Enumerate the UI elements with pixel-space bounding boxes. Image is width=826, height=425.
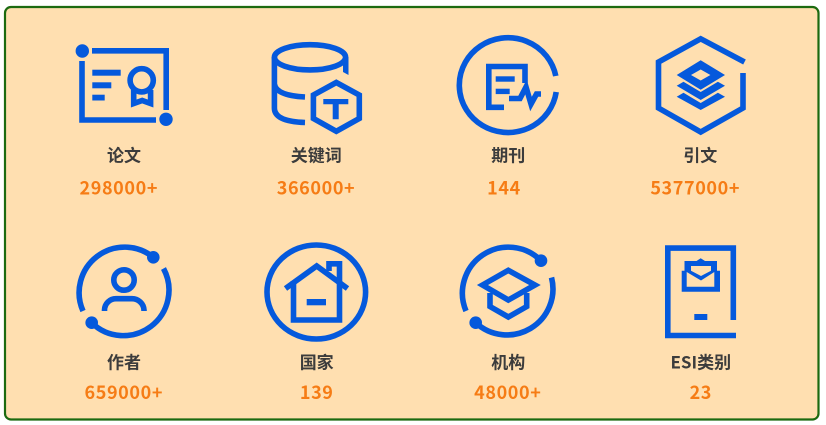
label: citation: 引文: [683, 141, 717, 166]
number: keyword count: 366000+: [277, 175, 355, 201]
icon: paper certificate: [76, 44, 173, 126]
number: ESI count: 23: [690, 379, 712, 405]
number: journal count: 144: [487, 175, 521, 201]
label: ESI category: ESI类别: [670, 348, 731, 373]
number: institution count: 48000+: [474, 379, 541, 405]
number: author count: 659000+: [85, 379, 163, 405]
label: author: 作者: [107, 348, 141, 373]
label: keyword: 关键词: [291, 141, 342, 166]
label: journal: 期刊: [491, 141, 525, 166]
icon: keyword database: [274, 45, 359, 131]
number: country count: 139: [300, 379, 334, 405]
icon: citation layers: [658, 39, 744, 132]
icon: ESI category: [668, 248, 736, 336]
number: paper count: 298000+: [80, 175, 158, 201]
icon: institution graduation cap: [462, 247, 553, 335]
icon: country house: [267, 245, 366, 339]
icon: journal: [459, 38, 556, 133]
label: institution: 机构: [491, 348, 525, 373]
icon: author: [79, 247, 169, 336]
label: country: 国家: [300, 348, 334, 373]
label: paper: 论文: [107, 141, 141, 166]
number: citation count: 5377000+: [650, 175, 740, 201]
